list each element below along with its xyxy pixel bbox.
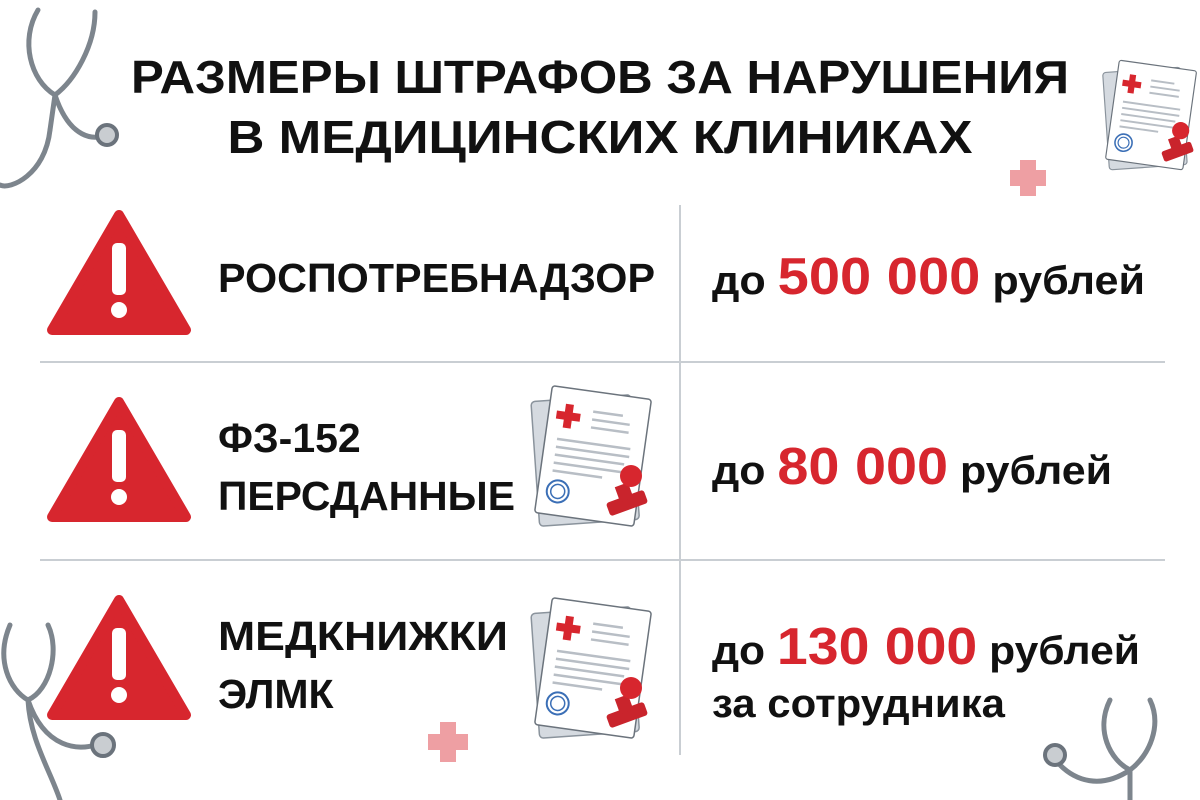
row 1: Роспотребнадзор: РОСПОТРЕБНАДЗОР (218, 255, 655, 301)
row 3: медкнижки (52, 598, 1140, 738)
row 3: медкнижки: за сотрудника (712, 682, 1006, 726)
row 2: ФЗ-152: до 80 000 рублей (712, 438, 1112, 496)
icon: plus top-right (1010, 160, 1046, 196)
title: В МЕДИЦИНСКИХ КЛИНИКАХ (228, 111, 973, 163)
row 2: ФЗ-152 (52, 386, 1112, 526)
row 3: медкнижки: МЕДКНИЖКИ (218, 613, 508, 659)
dividers (40, 205, 1165, 755)
row 1: Роспотребнадзор (52, 215, 1145, 330)
title (131, 51, 1069, 163)
icon: plus bottom (428, 722, 468, 762)
icon: documents top-right (1103, 60, 1197, 170)
row 3: медкнижки: до 130 000 рублей (712, 618, 1140, 676)
stethoscope bottom-right (1045, 700, 1155, 800)
stethoscope bottom-left (4, 625, 114, 800)
stethoscope top-left (0, 10, 117, 186)
row 2: ФЗ-152: ФЗ-152 (218, 415, 361, 461)
row 1: Роспотребнадзор: до 500 000 рублей (712, 248, 1145, 306)
row 3: медкнижки: ЭЛМК (218, 671, 335, 717)
title: РАЗМЕРЫ ШТРАФОВ ЗА НАРУШЕНИЯ (131, 51, 1069, 103)
row 2: ФЗ-152: ПЕРСДАННЫЕ (218, 473, 515, 519)
